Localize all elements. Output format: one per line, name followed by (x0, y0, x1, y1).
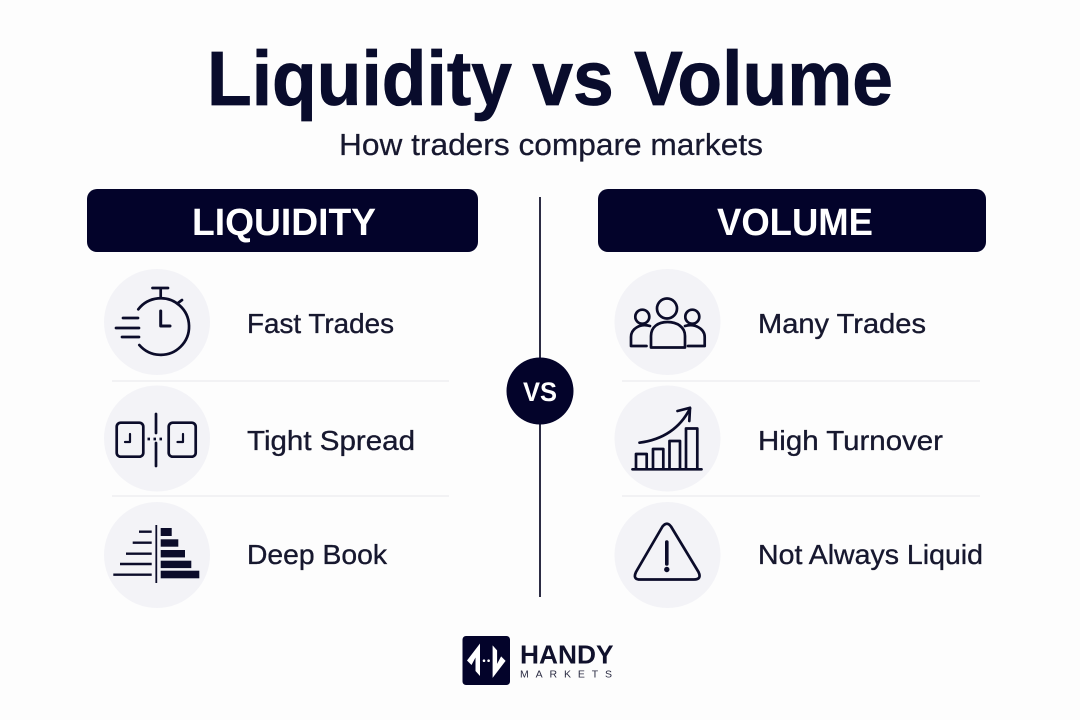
logo wordmark: HANDY (520, 642, 614, 670)
liquidity header: LIQUIDITY (192, 202, 376, 244)
label: fast trades: Fast Trades (247, 308, 394, 339)
volume header: VOLUME (717, 202, 873, 244)
subtitle: How traders compare markets (339, 127, 763, 162)
label: not always liquid: Not Always Liquid (758, 539, 983, 570)
label: high turnover: High Turnover (758, 425, 943, 456)
icon: deep book (104, 502, 210, 608)
logo mark (462, 636, 510, 685)
vs badge: VS (523, 377, 557, 407)
label: many trades: Many Trades (758, 308, 926, 339)
label: deep book: Deep Book (247, 539, 388, 570)
logo subtext: MARKETS (520, 668, 612, 680)
icon: people (614, 269, 720, 375)
title: Liquidity vs Volume (207, 36, 893, 122)
liquidity header (87, 189, 478, 252)
logo (462, 636, 614, 685)
icon: stopwatch (104, 269, 210, 375)
icon: warning (614, 502, 720, 608)
volume header (598, 189, 986, 252)
label: tight spread: Tight Spread (247, 425, 415, 456)
icon: tight spread (104, 386, 210, 492)
vs badge (506, 358, 574, 424)
panel: volume (598, 189, 986, 608)
panel: liquidity (87, 189, 478, 608)
center divider (539, 197, 541, 597)
icon: turnover chart (614, 386, 720, 492)
